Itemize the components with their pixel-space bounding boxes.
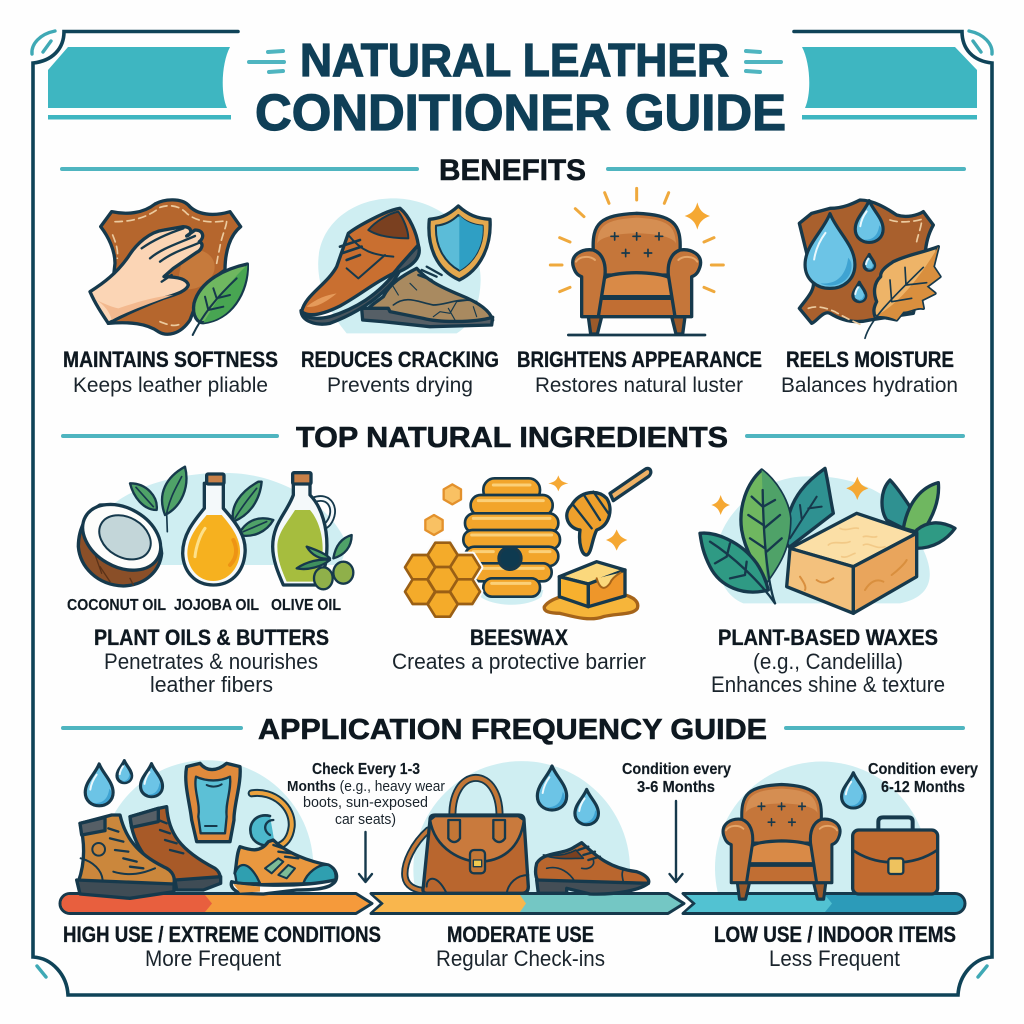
ingredient text: beeswax: BEESWAX: [470, 625, 568, 650]
icon: low use armchair, drop and briefcase: [723, 773, 938, 899]
ingredient text: plant oils and butters: Penetrates & nourishes: [104, 649, 318, 674]
benefit text: reduces cracking: [301, 347, 499, 397]
background bubbles: [100, 760, 928, 893]
arrow: moderate use: [670, 801, 682, 882]
ingredient text: plant-based waxes: (e.g., Candelilla): [753, 649, 903, 674]
title: NATURAL LEATHER: [300, 34, 729, 86]
frequency text: low use: Less Frequent: [769, 946, 900, 971]
title: CONDITIONER GUIDE: [255, 84, 786, 141]
ingredient text: plant oils and butters: PLANT OILS & BUTTERS: [94, 625, 329, 650]
frequency heading rule right: [786, 726, 963, 730]
callout: low use: 6-12 Months: [881, 779, 965, 796]
icon: shoes with shield: [301, 198, 493, 333]
frequency text: high use: More Frequent: [145, 946, 281, 971]
arrow: high use: [359, 832, 372, 882]
icon: coconut, jojoba and olive oils: [71, 467, 353, 589]
frequency text: low use: [714, 922, 956, 971]
callout: moderate use: [622, 761, 731, 796]
ingredients heading rule right: [747, 434, 963, 438]
frequency text: moderate use: [436, 922, 605, 971]
icon: leather with water drops and leaf: [799, 200, 940, 338]
frequency text: moderate use: MODERATE USE: [447, 922, 594, 947]
frequency text: moderate use: Regular Check-ins: [436, 946, 605, 971]
benefit labels: [63, 347, 958, 397]
panel: benefits: [62, 154, 964, 338]
ingredient labels: OLIVE OIL: [271, 597, 341, 614]
ingredient labels: [67, 597, 341, 614]
benefit text: reels moisture: REELS MOISTURE: [786, 347, 954, 372]
title speed lines left: [249, 51, 284, 72]
benefit text: reduces cracking: REDUCES CRACKING: [301, 347, 499, 372]
benefit text: brightens appearance: [517, 347, 762, 397]
header strip right: [802, 115, 977, 120]
benefit text: brightens appearance: Restores natural luster: [535, 373, 743, 397]
callout: moderate use: 3-6 Months: [637, 779, 715, 796]
benefit text: reduces cracking: Prevents drying: [327, 373, 473, 397]
icon: moderate use drops and shoe: [536, 766, 649, 894]
benefit text: brightens appearance: BRIGHTENS APPEARANCE: [517, 347, 762, 372]
benefit text: reels moisture: Balances hydration: [781, 373, 958, 397]
frequency heading: APPLICATION FREQUENCY GUIDE: [258, 714, 767, 746]
benefit text: reels moisture: [781, 347, 958, 397]
ingredient text: plant-based waxes: PLANT-BASED WAXES: [718, 625, 938, 650]
icon: moderate use handbag: [405, 778, 528, 893]
ingredient text: plant oils and butters: [94, 625, 329, 697]
ingredient text: plant-based waxes: [711, 625, 945, 697]
title speed lines right: [746, 51, 781, 72]
benefit text: maintains softness: MAINTAINS SOFTNESS: [63, 347, 278, 372]
icon: plant-based wax block with leaves: [700, 468, 955, 613]
header strip left: [48, 115, 231, 120]
icon: high use boots, vest, hose and sneaker: [77, 761, 337, 898]
icon: glowing armchair: [550, 188, 723, 335]
header band left: [48, 47, 230, 108]
frequency heading rule left: [63, 726, 241, 730]
benefits heading rule left: [62, 167, 417, 171]
ingredient text: beeswax: Creates a protective barrier: [392, 649, 646, 674]
header band right: [802, 47, 977, 108]
frequency text: high use: HIGH USE / EXTREME CONDITIONS: [63, 922, 381, 947]
panel: top natural ingredients: [63, 422, 963, 697]
frequency timeline bar: [60, 894, 965, 914]
panel: application frequency guide: [60, 714, 978, 971]
ingredient text: beeswax: [392, 625, 646, 674]
icon: hand on leather with leaf: [90, 200, 247, 335]
ingredient labels: JOJOBA OIL: [174, 597, 259, 614]
benefits heading rule right: [608, 167, 964, 171]
callout: high use: Months (e.g., heavy wear: [287, 778, 445, 795]
title: [255, 34, 786, 141]
ingredient labels: COCONUT OIL: [67, 597, 166, 614]
callout: low use: [868, 761, 978, 796]
callout: moderate use: Condition every: [622, 761, 731, 778]
ingredients heading rule left: [63, 434, 277, 438]
callout: high use: car seats): [335, 811, 396, 828]
benefits heading: BENEFITS: [439, 154, 586, 187]
icon: beeswax hive, honeycomb, dipper and block: [405, 468, 651, 619]
ingredients heading: TOP NATURAL INGREDIENTS: [296, 422, 728, 454]
ingredient text: plant oils and butters: leather fibers: [150, 672, 273, 697]
callout: high use: [287, 761, 445, 828]
benefit text: maintains softness: [63, 347, 278, 397]
callout: high use: boots, sun-exposed: [303, 794, 428, 811]
callout: low use: Condition every: [868, 761, 978, 778]
frequency text: high use: [63, 922, 381, 971]
frequency text: low use: LOW USE / INDOOR ITEMS: [714, 922, 956, 947]
benefit text: maintains softness: Keeps leather pliable: [73, 373, 268, 397]
callout: high use: Check Every 1-3: [312, 761, 420, 778]
ingredient text: plant-based waxes: Enhances shine & texture: [711, 672, 945, 697]
